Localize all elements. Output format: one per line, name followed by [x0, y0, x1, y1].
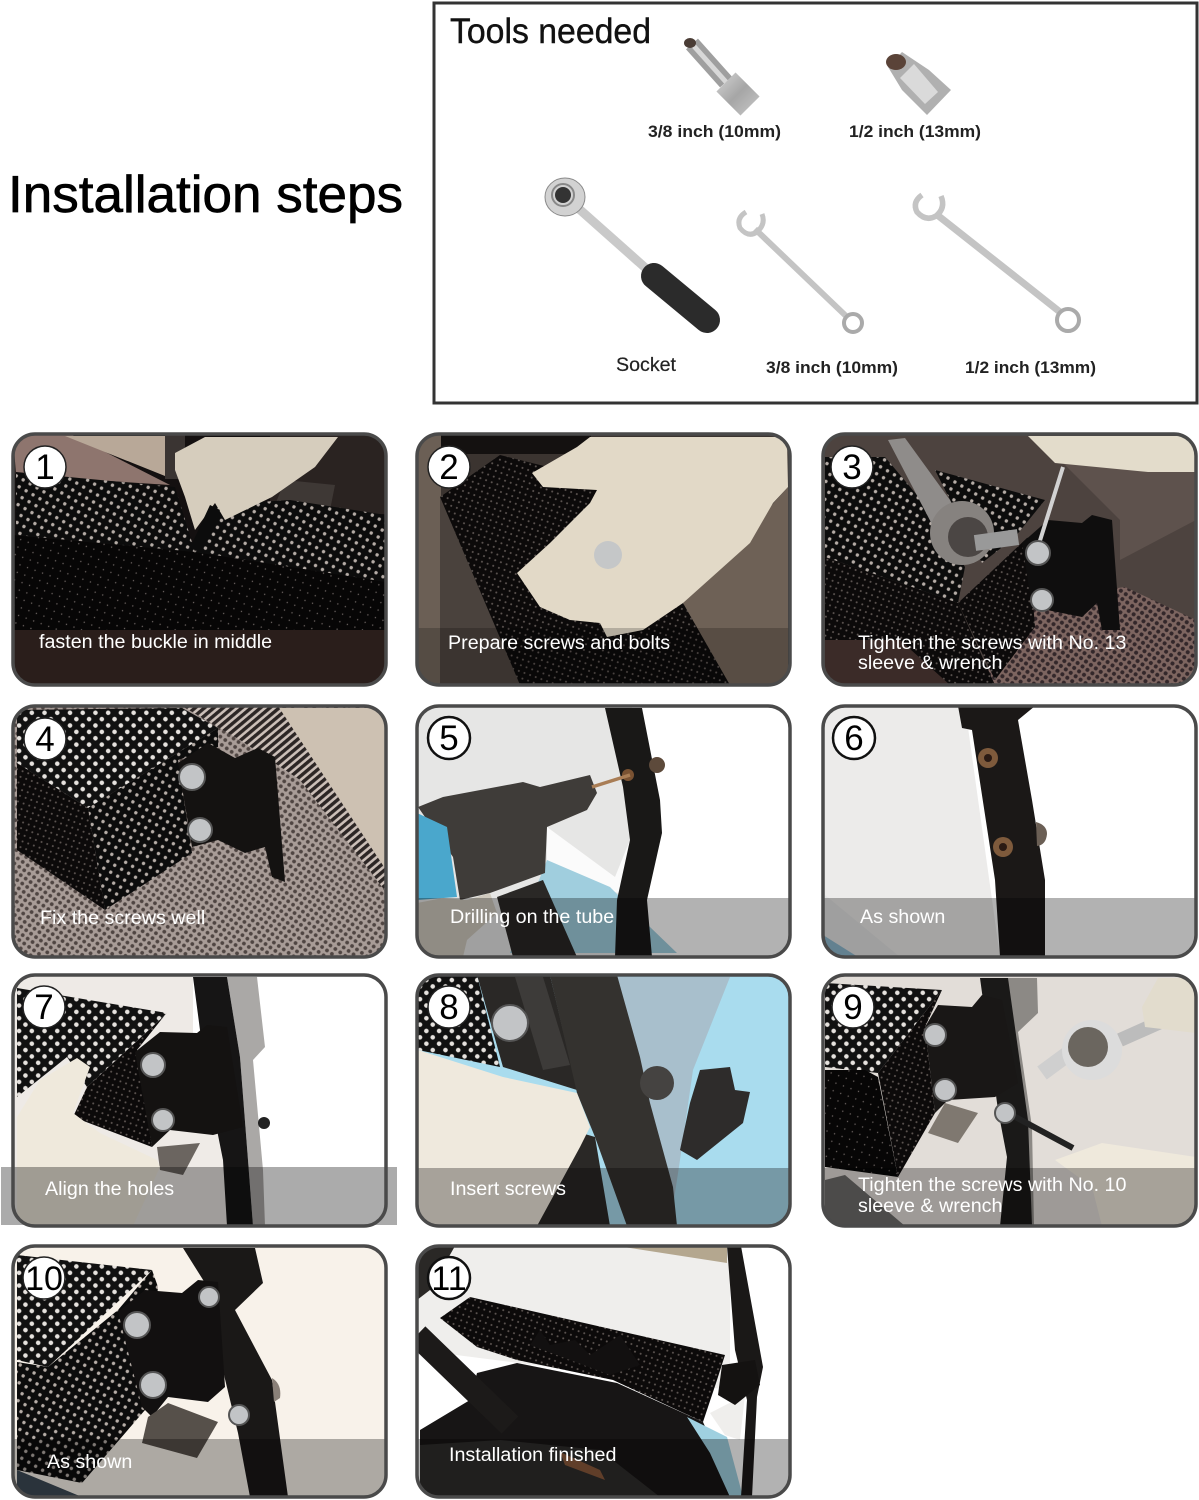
badge 8: 8: [439, 988, 459, 1027]
icon: 10mm socket: [684, 38, 750, 106]
badge 3: 3: [842, 448, 862, 487]
caption 7: Align the holes: [45, 1178, 174, 1200]
tools heading: Tools needed: [450, 12, 651, 51]
photo: drilled holes in the tube: [822, 706, 1196, 957]
label: 1/2 inch socket: 1/2 inch (13mm): [849, 122, 981, 141]
panel: step 1: [13, 434, 386, 685]
caption 5: Drilling on the tube: [450, 906, 614, 928]
badge 10: 10: [25, 1260, 63, 1298]
photo: gloved hand fastening the buckle: [13, 434, 386, 685]
photo: glove holding a bolt: [417, 434, 790, 685]
panel: step 2: [417, 434, 790, 685]
badge 2: 2: [439, 448, 459, 487]
badge 4: 4: [35, 720, 55, 759]
caption 9: [858, 1174, 1127, 1217]
badge 6: [833, 717, 875, 759]
badge 5: [428, 717, 470, 759]
icon: 13mm wrench: [915, 195, 1079, 331]
badge 1: 1: [35, 448, 55, 487]
caption 6: As shown: [860, 906, 945, 928]
badge 5: 5: [439, 719, 459, 758]
photo: tightening the screws with a wrench and ratchet: [823, 975, 1196, 1226]
icon: socket ratchet: [545, 178, 707, 320]
label: socket: Socket: [616, 355, 677, 376]
title: Installation steps: [8, 165, 403, 223]
badge 3: [831, 446, 873, 488]
badge 7: [23, 986, 65, 1028]
panel: step 6: [822, 706, 1196, 957]
photo: drilling into the tube: [417, 706, 790, 957]
caption 3: sleeve & wrench: [858, 652, 1002, 674]
photo: inserting screws through the tube: [417, 975, 790, 1226]
icon: 13mm socket: [886, 52, 951, 115]
badge 4: [24, 718, 66, 760]
caption 9: sleeve & wrench: [858, 1195, 1002, 1217]
panel: step 5: [417, 706, 790, 957]
caption 11: Installation finished: [449, 1444, 616, 1466]
caption 2: Prepare screws and bolts: [448, 632, 670, 654]
photo: finished bracket on the tube: [13, 1246, 386, 1497]
icon: 10mm wrench: [739, 212, 862, 332]
photo: installed basket on the golf cart: [417, 1246, 790, 1497]
caption 9: Tighten the screws with No. 10: [858, 1174, 1127, 1196]
panel: step 10: [13, 1246, 386, 1497]
badge 8: [428, 986, 470, 1028]
photo: tightening with ratchet and wrench: [823, 434, 1196, 685]
panel: step 3: [823, 434, 1196, 685]
panel: step 11: [417, 1246, 790, 1497]
panel: tools needed: [434, 3, 1197, 403]
badge 7: 7: [34, 988, 54, 1027]
badge 11: 11: [431, 1260, 467, 1298]
panel: step 7: [1, 975, 397, 1226]
label: 1/2 inch wrench: 1/2 inch (13mm): [965, 358, 1096, 377]
caption 1: fasten the buckle in middle: [39, 631, 272, 653]
caption 3: [858, 632, 1127, 674]
caption 10: As shown: [47, 1451, 132, 1473]
caption 8: Insert screws: [450, 1178, 566, 1200]
panel: step 8: [417, 975, 790, 1226]
badge 1: [24, 446, 66, 488]
badge 9: [832, 986, 874, 1028]
overflowing band 7: [1, 1167, 397, 1225]
badge 6: 6: [844, 719, 864, 758]
panel: step 4: [13, 706, 386, 957]
caption 3: Tighten the screws with No. 13: [858, 632, 1127, 654]
label: 3/8 inch socket: 3/8 inch (10mm): [648, 122, 781, 141]
panel: step 9: [823, 975, 1196, 1226]
photo: basket bracket bolted on seat fabric: [13, 706, 386, 957]
badge 2: [428, 446, 470, 488]
photo: aligning the bracket holes: [14, 976, 270, 1224]
label: 3/8 inch wrench: 3/8 inch (10mm): [766, 358, 898, 377]
caption 4: Fix the screws well: [40, 907, 205, 929]
badge 9: 9: [843, 988, 863, 1027]
